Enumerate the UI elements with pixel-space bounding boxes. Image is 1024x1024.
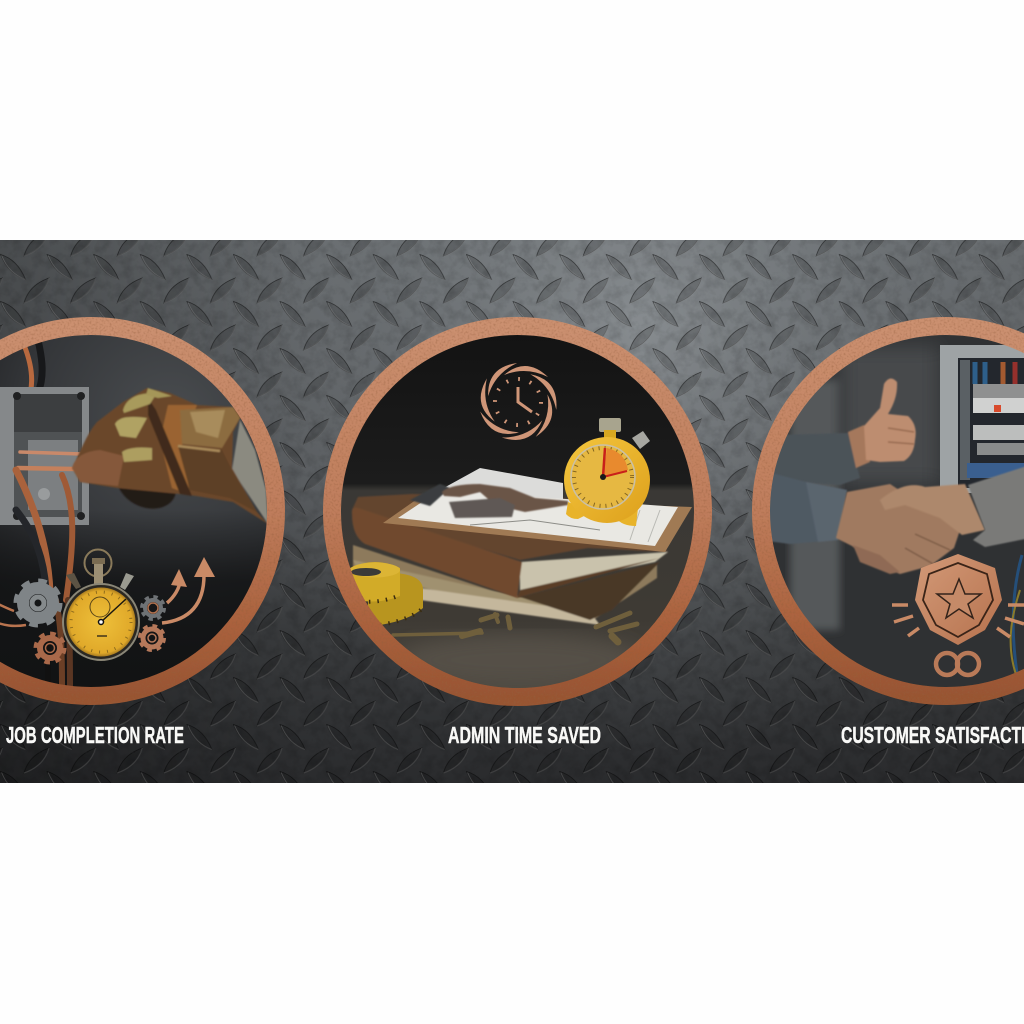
leather book	[352, 494, 668, 598]
panel: diamond plate banner	[0, 240, 1024, 783]
glove gripping wires	[72, 388, 268, 524]
adjustable wrench	[410, 484, 568, 518]
clasped hands	[836, 484, 985, 574]
clipboard with sketch sheet	[383, 468, 692, 552]
gear: small steel	[142, 597, 164, 619]
label: admin time saved: ADMIN TIME SAVED	[448, 722, 601, 748]
arrows rising	[162, 557, 215, 623]
icon: copper star badge	[915, 554, 1002, 645]
ring: right copper frame	[761, 326, 1024, 696]
nails and screws	[393, 613, 637, 642]
label: job completion rate: JOB COMPLETION RATE	[6, 722, 184, 748]
yellow stopwatch	[564, 418, 650, 526]
icon: copper aperture clock	[480, 363, 556, 440]
ring: centre copper frame	[332, 326, 703, 697]
icon: linked rings	[936, 653, 979, 675]
left sleeve	[770, 474, 848, 544]
gear: large steel	[17, 582, 59, 624]
gear: copper lower left	[36, 634, 64, 662]
tape measure	[350, 562, 423, 625]
right sleeve	[968, 465, 1024, 547]
wires above junction box	[22, 342, 46, 387]
copper wires into glove	[16, 452, 82, 688]
icon: badge rays	[892, 605, 1024, 637]
thumbs up hand	[760, 378, 916, 485]
electrical cabinet	[940, 345, 1024, 493]
stopwatch with yellow dial	[63, 550, 139, 660]
gear: copper right	[140, 626, 164, 650]
wires left of gears	[0, 600, 26, 626]
panel: job completion rate scene	[0, 330, 270, 690]
panel: admin time saved scene	[340, 334, 696, 690]
lower notebook	[353, 545, 660, 625]
junction box	[0, 387, 89, 525]
panel: customer satisfaction scene	[760, 330, 1024, 690]
ring: left copper frame	[0, 326, 276, 696]
wires lower right	[1011, 555, 1022, 680]
